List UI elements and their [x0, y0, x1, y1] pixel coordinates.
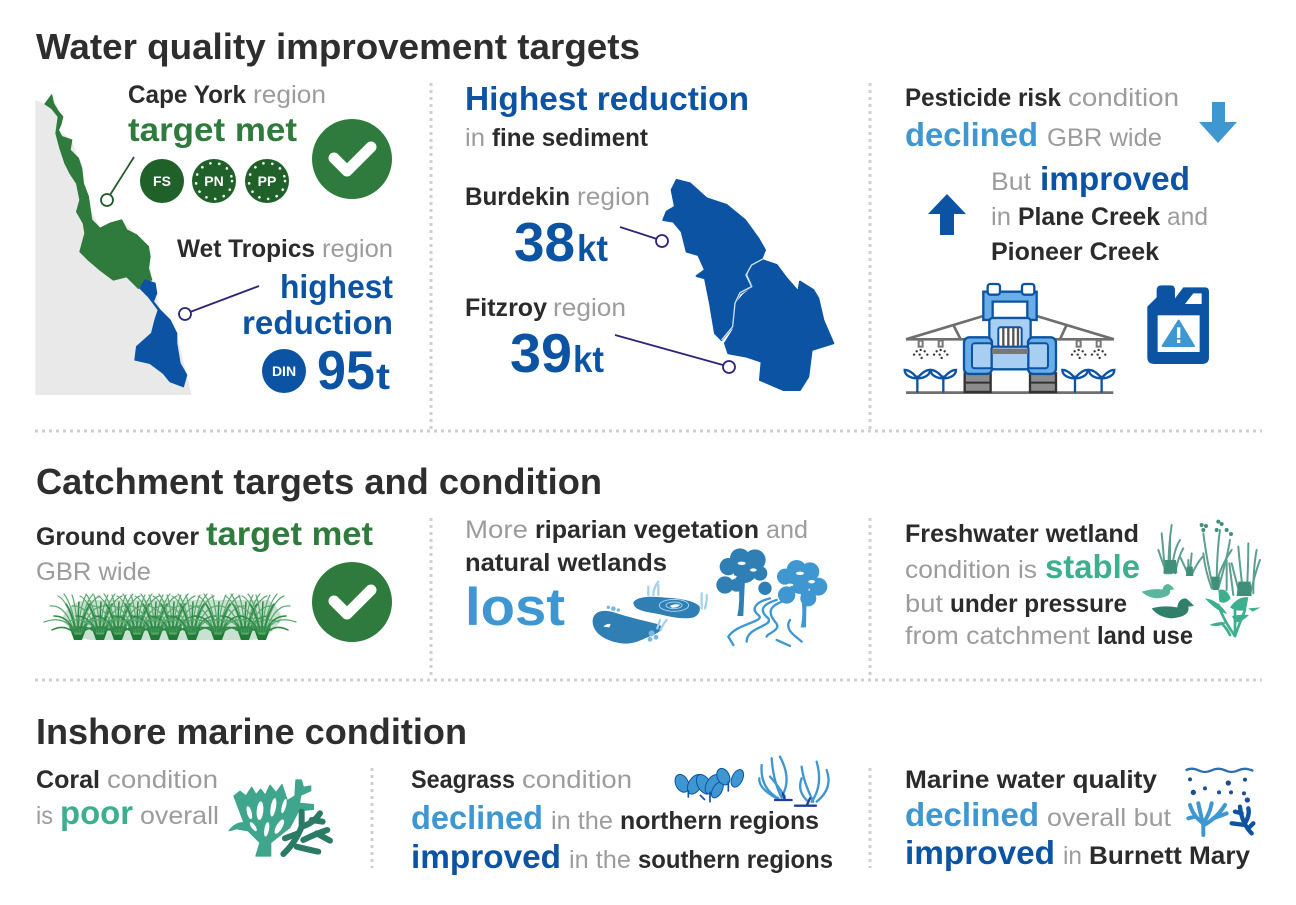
text: pesticide risk condition: Pesticide risk: [905, 84, 1061, 112]
heading: Wet Tropics region: region: [322, 235, 393, 263]
icon: tractor with spray booms: [905, 284, 1114, 393]
panel: marine water quality: [905, 766, 1253, 871]
text: declined overall but: [905, 796, 1171, 833]
text: coral condition: [36, 766, 218, 794]
text: Burdekin region: region: [577, 183, 650, 211]
badge: PP: [245, 159, 289, 203]
heading: Cape York region: region: [253, 81, 326, 109]
text: but under pressure: under pressure: [950, 590, 1127, 618]
text: but improved: But: [991, 168, 1031, 196]
number: 38kt: [514, 211, 608, 273]
panel: coral condition: [36, 766, 330, 856]
panel: riparian vegetation and wetlands lost: [465, 516, 827, 646]
title: catchment targets and condition: Catchment targets and condition: [36, 461, 602, 502]
badge: PP: PP: [258, 173, 276, 189]
text: declined overall but: overall but: [1047, 804, 1171, 832]
panel: Cape York and Wet Tropics regions: [35, 81, 393, 401]
number: 95t: t: [376, 356, 390, 397]
heading: Wet Tropics region: [177, 235, 393, 263]
callout line: Burdekin: [620, 227, 668, 247]
text: from catchment land use: [905, 622, 1193, 650]
heading: Cape York region: [128, 81, 326, 109]
number: 38kt: kt: [577, 228, 608, 269]
icon: chemical jug with warning: [1147, 285, 1209, 364]
text: improved in the southern regions: in the: [569, 846, 631, 874]
text: but under pressure: but: [905, 590, 943, 618]
panel: freshwater wetland condition: [905, 520, 1261, 650]
panel: pesticide risk: [905, 84, 1237, 393]
text: declined overall but: declined: [905, 796, 1039, 833]
number: 38kt: 38: [514, 211, 575, 273]
badge: FS: FS: [153, 173, 171, 189]
text: pesticide risk condition: [905, 84, 1179, 112]
map: Queensland coast with Cape York and Wet Tropics: [35, 95, 192, 395]
text: pesticide risk condition: condition: [1068, 84, 1179, 112]
text: in fine sediment: fine sediment: [492, 124, 649, 152]
text: seagrass condition: Seagrass: [411, 766, 515, 794]
text: in Plane Creek and: [991, 203, 1208, 231]
text: more riparian vegetation and: and: [766, 516, 808, 544]
text: declined in the northern regions: in the: [551, 807, 613, 835]
icon: grass tufts: [44, 594, 296, 640]
text: condition is stable: condition is: [905, 556, 1037, 584]
icon: seagrass strands: [759, 757, 829, 806]
heading: highest reduction: Highest reduction: [465, 80, 749, 117]
text: improved in Burnett Mary: in: [1063, 842, 1082, 870]
text: declined in the northern regions: [411, 799, 819, 836]
icon: seagrass leaves: [672, 766, 746, 802]
text: from catchment land use: land use: [1097, 622, 1193, 650]
number: 39kt: [510, 322, 604, 384]
text: declined GBR wide: declined: [905, 116, 1038, 153]
callout line: Fitzroy: [615, 335, 735, 373]
text: improved in the southern regions: southern regions: [638, 846, 833, 874]
number: 95t: 95: [317, 339, 375, 401]
text: Burdekin region: Burdekin: [465, 183, 570, 211]
text: seagrass condition: condition: [522, 766, 632, 794]
text: condition is stable: stable: [1045, 548, 1140, 585]
text: Fitzroy region: region: [553, 294, 626, 322]
map: Burdekin and Fitzroy regions: [663, 180, 833, 390]
text: Fitzroy region: Fitzroy: [465, 294, 547, 322]
text: in Plane Creek and: in: [991, 203, 1011, 231]
number: 39kt: 39: [510, 322, 572, 384]
text: coral condition: condition: [107, 766, 218, 794]
text: condition is stable: [905, 548, 1140, 585]
text: highest reduction: reduction: [242, 304, 393, 341]
heading: Wet Tropics region: Wet Tropics: [177, 235, 315, 263]
text: is poor overall: overall: [140, 802, 219, 830]
icon: trees and river: [716, 548, 827, 646]
text: more riparian vegetation and: riparian vegetation: [535, 516, 759, 544]
title: water quality improvement targets: Water quality improvement targets: [36, 26, 640, 67]
badge: PN: [192, 159, 236, 203]
text: marine water quality: Marine water quality: [905, 766, 1157, 794]
text: target met: target met: [128, 111, 297, 148]
text: is poor overall: poor: [60, 794, 133, 831]
text: declined in the northern regions: northern regions: [620, 807, 819, 835]
text: highest reduction: [242, 268, 393, 341]
icon: water, particles and corals: [1186, 769, 1253, 835]
text: from catchment land use: from catchment: [905, 622, 1090, 650]
text: GBR wide: GBR wide: [36, 558, 151, 586]
panel: highest reduction in fine sediment: [465, 80, 833, 390]
icon: wetland ponds: [593, 582, 707, 644]
title: inshore marine condition: Inshore marine condition: [36, 711, 467, 752]
text: freshwater wetland: Freshwater wetland: [905, 520, 1139, 548]
badge: DIN: DIN: [272, 363, 296, 379]
badge: FS: [140, 159, 184, 203]
panel: seagrass condition: [411, 757, 833, 875]
icon: reeds, ducks and wetland plants: [1142, 520, 1261, 636]
text: is poor overall: [36, 794, 219, 831]
text: ground cover target met: Ground cover: [36, 523, 199, 551]
text: Pioneer Creek: Pioneer Creek: [991, 238, 1159, 266]
text: improved in Burnett Mary: improved: [905, 834, 1055, 871]
number: 39kt: kt: [573, 339, 604, 380]
icon: check mark: [312, 562, 392, 642]
text: improved in Burnett Mary: Burnett Mary: [1089, 842, 1250, 870]
text: in Plane Creek and: Plane Creek: [1018, 203, 1160, 231]
text: improved in the southern regions: improved: [411, 838, 561, 875]
icon: check mark: [312, 119, 392, 199]
text: declined GBR wide: GBR wide: [1047, 124, 1162, 152]
text: is poor overall: is: [36, 802, 53, 830]
text: ground cover target met: [36, 515, 373, 552]
text: coral condition: Coral: [36, 766, 100, 794]
icon: down arrow: [1199, 102, 1237, 143]
badge: DIN: [262, 349, 306, 393]
text: seagrass condition: [411, 766, 632, 794]
text: Fitzroy region: [465, 294, 626, 322]
text: Burdekin region: [465, 183, 650, 211]
icon: up arrow: [928, 194, 966, 235]
text: in Plane Creek and: and: [1167, 203, 1208, 231]
text: improved in the southern regions: [411, 838, 833, 875]
icon: coral: [229, 780, 330, 856]
text: but improved: improved: [1040, 160, 1190, 197]
callout line: Cape York: [101, 157, 134, 206]
text: in fine sediment: in: [465, 124, 485, 152]
panel: ground cover: [36, 515, 392, 642]
text: lost: lost: [465, 578, 565, 637]
text: improved in Burnett Mary: [905, 834, 1250, 871]
callout line: Wet Tropics: [179, 286, 259, 320]
text: declined in the northern regions: declined: [411, 799, 543, 836]
text: more riparian vegetation and: More: [465, 516, 528, 544]
heading: Cape York region: Cape York: [128, 81, 246, 109]
badge: PN: PN: [204, 173, 224, 189]
text: natural wetlands: natural wetlands: [465, 549, 667, 577]
text: ground cover target met: target met: [206, 515, 373, 552]
text: more riparian vegetation and: [465, 516, 808, 544]
text: declined GBR wide: [905, 116, 1162, 153]
text: highest reduction: highest: [280, 268, 393, 305]
